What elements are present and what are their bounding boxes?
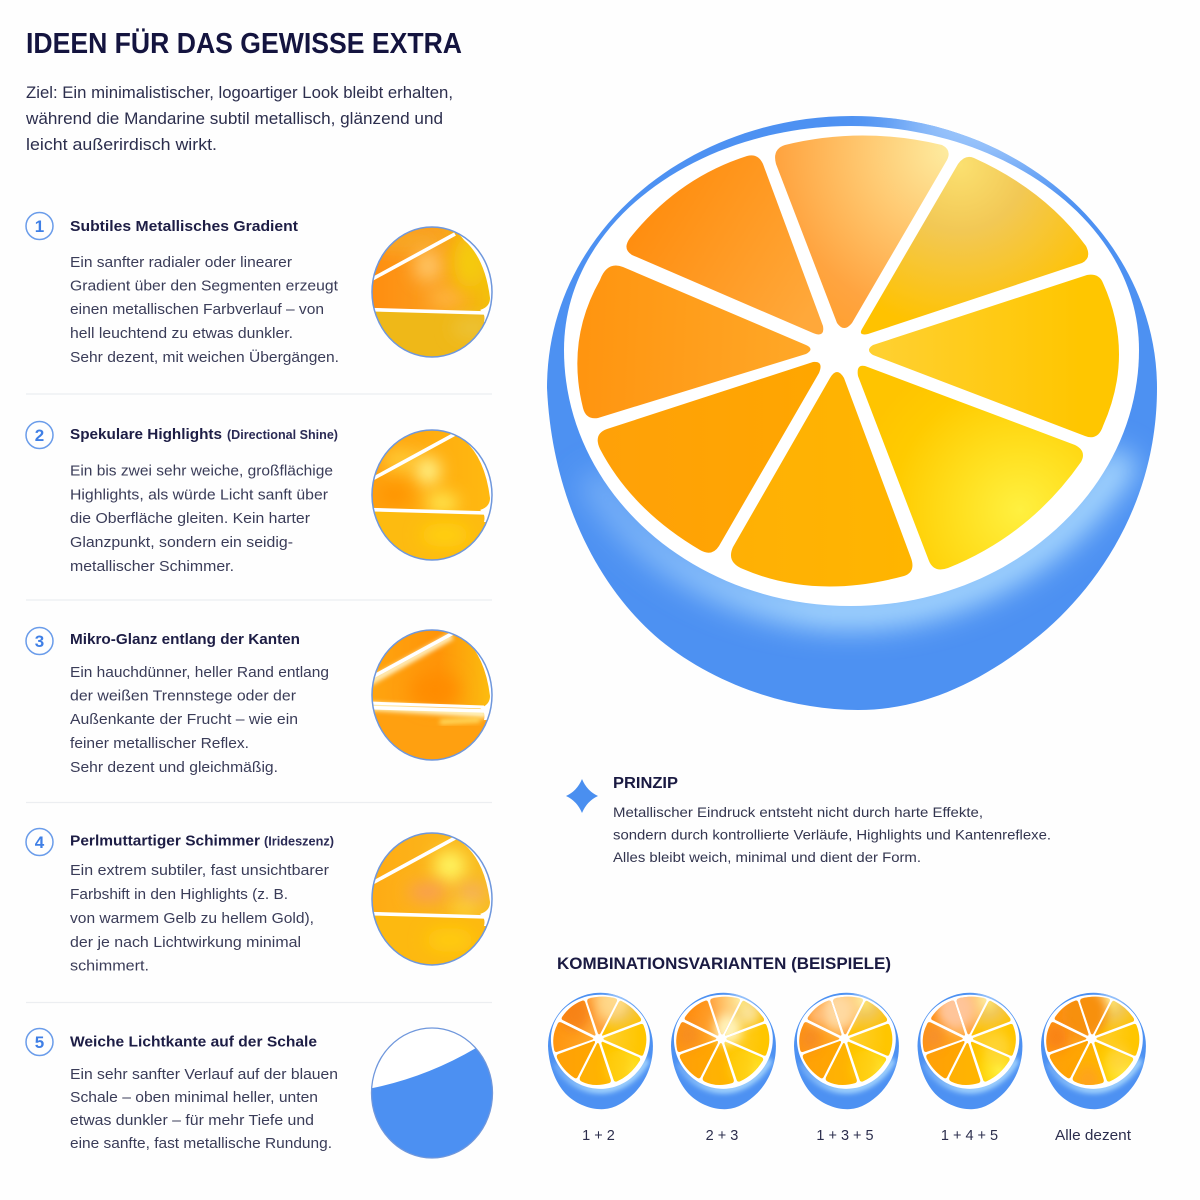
- number badge 1: [26, 212, 53, 240]
- description 3: feiner metallischer Reflex.: [70, 735, 249, 752]
- fruit variant alle dezent: [1041, 986, 1146, 1109]
- description 2: Highlights, als würde Licht sanft über: [70, 486, 328, 504]
- combination 1 + 3 + 5: [794, 986, 899, 1144]
- caption alle dezent: Alle dezent: [1055, 1128, 1131, 1144]
- thumbnail 1: metallic gradient: [371, 226, 493, 358]
- description 3: [70, 664, 329, 776]
- thumbnail 3: edge micro gloss: [371, 629, 493, 761]
- fruit variant 1 + 3 + 5: [794, 986, 899, 1109]
- principle text: [613, 804, 1051, 865]
- icon: blue four-point star: [566, 779, 598, 813]
- heading 4: Perlmuttartiger Schimmer: [70, 832, 260, 850]
- heading 1: Subtiles Metallisches Gradient: [70, 218, 298, 235]
- principle text: Metallischer Eindruck entsteht nicht durch harte Effekte,: [613, 804, 983, 820]
- combination 1 + 4 + 5: [918, 986, 1022, 1144]
- fruit variant 1 + 4 + 5: [918, 986, 1022, 1109]
- principle heading: PRINZIP: [613, 775, 678, 792]
- main illustration: halved tangerine: [547, 80, 1157, 710]
- number badge 3: 3: [35, 632, 44, 651]
- description 5: etwas dunkler – für mehr Tiefe und: [70, 1112, 314, 1129]
- description 2: [70, 462, 333, 575]
- intro text: leicht außerirdisch wirkt.: [26, 136, 217, 154]
- heading 5: Weiche Lichtkante auf der Schale: [70, 1034, 317, 1050]
- description 1: Sehr dezent, mit weichen Übergängen.: [70, 348, 339, 366]
- principle text: sondern durch kontrollierte Verläufe, Highlights und Kantenreflexe.: [613, 826, 1051, 842]
- description 5: Schale – oben minimal heller, unten: [70, 1089, 318, 1106]
- fruit variant 1 + 2: [548, 986, 653, 1109]
- heading 3: Mikro-Glanz entlang der Kanten: [70, 631, 300, 648]
- combination 2 + 3: [671, 986, 776, 1144]
- panel: idea 1: [26, 212, 505, 366]
- description 5: eine sanfte, fast metallische Rundung.: [70, 1135, 332, 1152]
- description 1: einen metallischen Farbverlauf – von: [70, 301, 324, 318]
- description 1: Ein sanfter radialer oder linearer: [70, 254, 292, 271]
- principle text: Alles bleibt weich, minimal und dient der Form.: [613, 849, 921, 865]
- number badge 4: 4: [35, 833, 45, 852]
- principle callout: [566, 775, 1051, 865]
- number badge 4: [26, 828, 53, 856]
- combination 1 + 2: [548, 986, 653, 1144]
- number badge 2: 2: [35, 426, 44, 445]
- description 5: Ein sehr sanfter Verlauf auf der blauen: [70, 1066, 338, 1083]
- description 2: Glanzpunkt, sondern ein seidig-: [70, 534, 293, 551]
- description 5: [70, 1066, 338, 1152]
- heading 4: (Irideszenz): [264, 834, 334, 848]
- description 4: von warmem Gelb zu hellem Gold),: [70, 910, 314, 927]
- panel: idea 3: [26, 620, 505, 776]
- description 2: Ein bis zwei sehr weiche, großflächige: [70, 462, 333, 480]
- number badge 1: 1: [35, 217, 44, 236]
- description 2: metallischer Schimmer.: [70, 558, 234, 575]
- intro text: Ziel: Ein minimalistischer, logoartiger Look bleibt erhalten,: [26, 84, 453, 102]
- description 4: Ein extrem subtiler, fast unsichtbarer: [70, 862, 329, 879]
- caption 2 + 3: 2 + 3: [706, 1128, 738, 1144]
- description 4: Farbshift in den Highlights (z. B.: [70, 886, 288, 903]
- caption 1 + 3 + 5: 1 + 3 + 5: [816, 1128, 874, 1144]
- description 4: der je nach Lichtwirkung minimal: [70, 934, 301, 951]
- panel: idea 5: [26, 1026, 500, 1162]
- description 1: [70, 254, 339, 366]
- panel: idea 2: [26, 422, 505, 575]
- description 3: Sehr dezent und gleichmäßig.: [70, 759, 278, 776]
- description 3: der weißen Trennstege oder der: [70, 688, 296, 704]
- intro text: [25, 84, 453, 154]
- number badge 5: 5: [35, 1033, 44, 1052]
- heading 2: (Directional Shine): [227, 428, 338, 442]
- number badge 3: [26, 628, 53, 654]
- description 4: schimmert.: [70, 958, 149, 974]
- thumbnail 4: pearlescent shimmer: [371, 832, 493, 966]
- heading 4: [70, 832, 334, 850]
- panel: idea 4: [26, 826, 505, 974]
- caption 1 + 4 + 5: 1 + 4 + 5: [941, 1128, 998, 1144]
- number badge 5: [26, 1028, 53, 1056]
- description 1: Gradient über den Segmenten erzeugt: [70, 278, 339, 294]
- intro text: während die Mandarine subtil metallisch, glänzend und: [25, 110, 443, 128]
- caption 1 + 2: 1 + 2: [582, 1128, 615, 1144]
- description 1: hell leuchtend zu etwas dunkler.: [70, 325, 293, 342]
- heading 2: [70, 426, 338, 443]
- heading 2: Spekulare Highlights: [70, 426, 222, 443]
- description 3: Außenkante der Frucht – wie ein: [70, 711, 298, 728]
- thumbnail 5: soft light edge on peel: [368, 1026, 500, 1162]
- description 4: [70, 862, 329, 974]
- combinations heading: KOMBINATIONSVARIANTEN (BEISPIELE): [557, 954, 891, 973]
- title: IDEEN FÜR DAS GEWISSE EXTRA: [26, 28, 462, 60]
- fruit variant 2 + 3: [671, 986, 776, 1109]
- thumbnail 2: specular highlights: [371, 429, 493, 561]
- description 3: Ein hauchdünner, heller Rand entlang: [70, 664, 329, 681]
- number badge 2: [26, 422, 53, 448]
- description 2: die Oberfläche gleiten. Kein harter: [70, 510, 310, 527]
- combination alle dezent: [1041, 986, 1146, 1144]
